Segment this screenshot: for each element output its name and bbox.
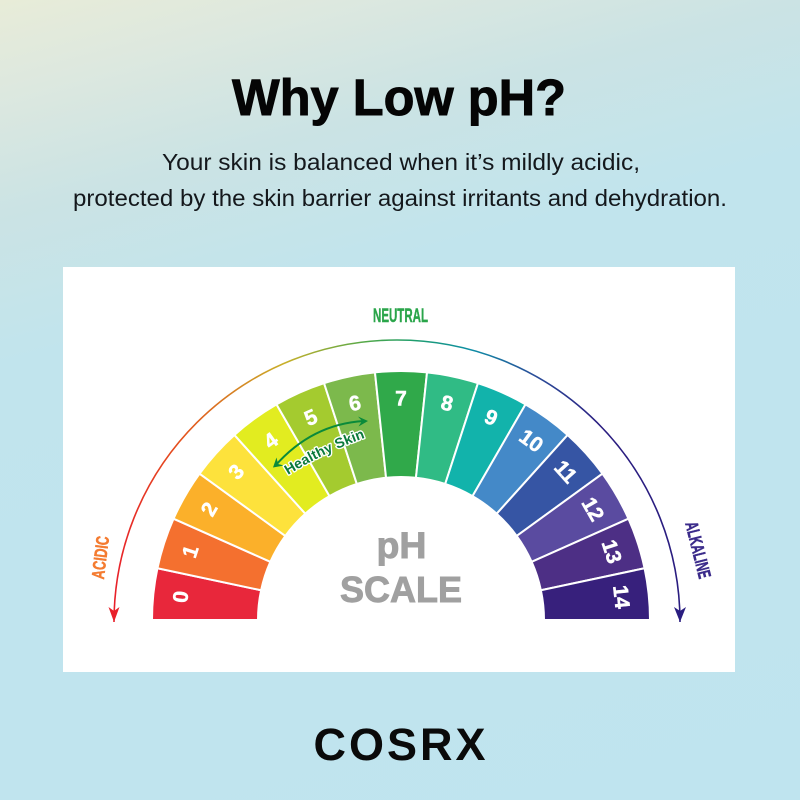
- gauge: pH segments: [151, 371, 651, 631]
- title: Why Low pH?: [232, 69, 566, 126]
- segment 2: [172, 473, 291, 571]
- segment 3: 3: [224, 460, 249, 484]
- segment 12: [511, 473, 630, 571]
- segment 13: 13: [597, 537, 626, 566]
- label: healthy skin: Healthy Skin: [282, 430, 366, 476]
- segment 2: 2: [197, 499, 222, 520]
- segment 14: 14: [608, 584, 633, 610]
- segment 14: [540, 568, 651, 631]
- segment 8: [405, 371, 478, 486]
- segment 9: [435, 382, 526, 501]
- subtitle text: Your skin is balanced when it’s mildly acidic,: [162, 149, 640, 175]
- segment 10: 10: [515, 425, 547, 457]
- segment 8: 8: [439, 391, 455, 416]
- logo: COSRX: COSRX: [314, 719, 486, 770]
- arrow: healthy skin range: [273, 416, 368, 468]
- subtitle text: [73, 149, 727, 211]
- panel: pH scale: [63, 267, 735, 672]
- segment 5: [276, 382, 367, 501]
- segment 11: [489, 434, 603, 544]
- subtitle text: protected by the skin barrier against irritants and dehydration.: [73, 185, 727, 211]
- segment 5: 5: [301, 405, 321, 431]
- segment 4: [234, 403, 338, 520]
- arrow: acidic to alkaline arc: [108, 340, 686, 622]
- centre label: pH scale: pH: [376, 525, 426, 566]
- centre label: pH scale: SCALE: [340, 569, 462, 610]
- segment 7: 7: [395, 388, 407, 410]
- segment 6: 6: [347, 391, 363, 416]
- segment 11: 11: [549, 456, 581, 488]
- segment 0: [151, 568, 262, 631]
- segment 9: 9: [481, 405, 501, 431]
- label: neutral: NEUTRAL: [373, 306, 428, 327]
- segment 3: [199, 434, 313, 544]
- label: acidic: ACIDIC: [88, 535, 113, 580]
- segment 1: 1: [178, 542, 204, 561]
- segment 1: [156, 518, 274, 601]
- segment 6: [324, 371, 397, 486]
- segment 7: [375, 371, 427, 478]
- segment 12: 12: [577, 494, 608, 525]
- segment 4: 4: [260, 428, 283, 454]
- segment 13: [528, 518, 646, 601]
- segment 0: 0: [169, 590, 193, 604]
- label: alkaline: ALKALINE: [681, 519, 715, 581]
- segment 10: [464, 403, 568, 520]
- centre label: pH scale: [340, 525, 462, 610]
